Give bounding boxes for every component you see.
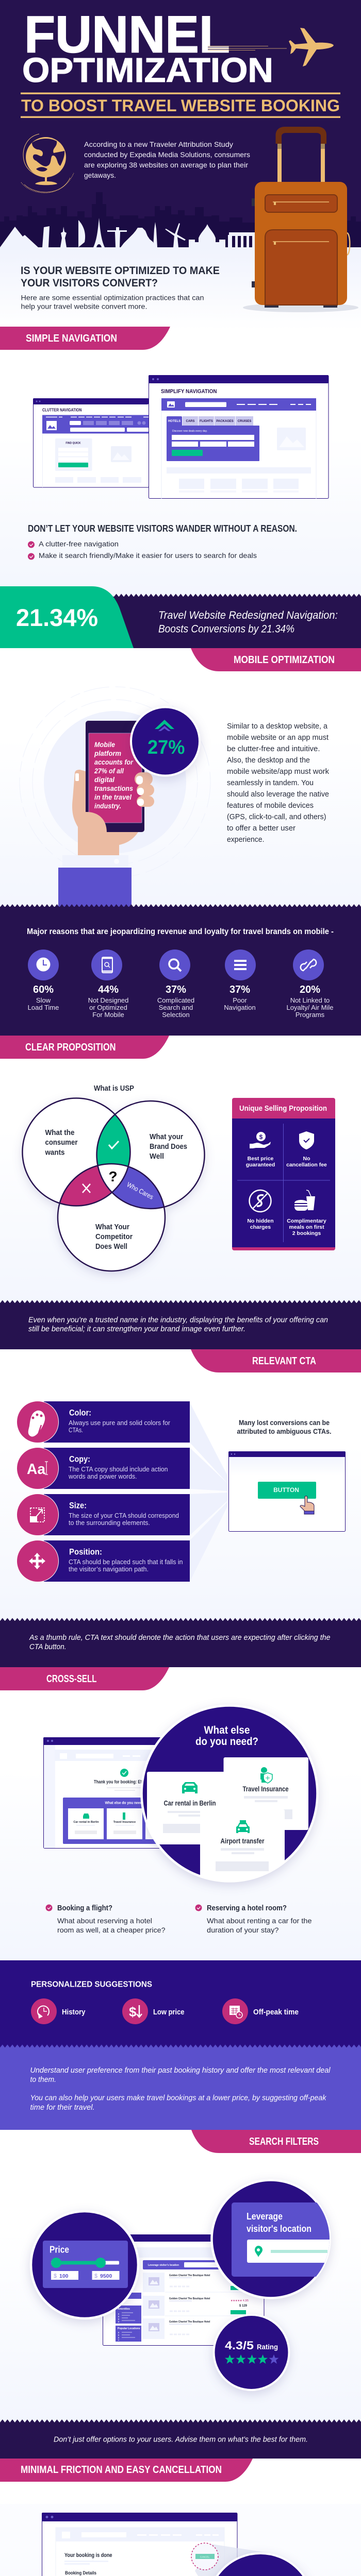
intro text: conducted by Expedia Media Solutions, consumers <box>84 150 250 159</box>
magnifier heading: do you need? <box>195 1736 258 1748</box>
stats labels: Complicated <box>157 996 194 1004</box>
browser: simplify navigation: SIMPLIFY NAVIGATION <box>161 388 217 395</box>
mobile body text: features of mobile devices <box>227 801 314 810</box>
mobile body text: should also leverage the native <box>227 790 329 799</box>
USP labels: Best price <box>248 1156 274 1162</box>
icon: clock <box>28 950 59 980</box>
icon: suitcase <box>243 127 358 312</box>
row: size <box>17 1494 190 1535</box>
panel: personalized suggestions <box>0 1960 361 2048</box>
icon: pointer hand <box>300 1496 314 1514</box>
browser: CTA button <box>228 1451 346 1531</box>
callout: small cancel button <box>191 2543 268 2576</box>
browser: booking done <box>42 2513 237 2576</box>
browser: simplify navigation: FLIGHTS <box>200 420 213 423</box>
mobile body text <box>227 722 329 844</box>
magnifier: rating: Rating <box>257 2343 278 2351</box>
browser: CTA button: BUTTON <box>273 1486 299 1494</box>
magnifier heading: What else <box>204 1724 250 1736</box>
cross-sell tips <box>45 1904 312 1934</box>
checklist: navigation tips: A clutter-free navigation <box>39 540 119 548</box>
stats labels: Navigation <box>224 1004 256 1011</box>
listing rows: Golden Chariot The Boutique Hotel <box>169 2320 210 2324</box>
panel: reasons on mobile <box>0 904 361 1036</box>
panel: personalized suggestions: PERSONALIZED SUGGESTIONS <box>31 1980 152 1989</box>
icon: hand with coin: $ <box>259 1133 263 1141</box>
note band: user preference <box>0 2044 361 2130</box>
icon: globe <box>21 134 74 193</box>
heading: is your website optimized <box>21 265 220 289</box>
icon: Aa text: Aa <box>27 1461 46 1478</box>
cross-sell tips: Booking a flight? <box>57 1904 112 1912</box>
phone screen text: 27% of all <box>94 767 124 775</box>
CTA statement: attributed to ambiguous CTAs. <box>237 1428 331 1435</box>
phone screen text: Mobile <box>94 740 115 749</box>
badge: 27% <box>131 707 200 776</box>
venn diagram: Well <box>150 1153 164 1161</box>
note band: thumb rule: CTA button. <box>29 1643 66 1651</box>
card: airport transfer <box>200 1809 285 1880</box>
mobile body text: Similar to a desktop website, a <box>227 722 328 731</box>
listing rows: ★★★★★ 4.3/5 <box>231 2299 249 2302</box>
cross-sell tips: room as well, at a cheaper price? <box>57 1926 166 1934</box>
USP labels: charges <box>250 1224 271 1230</box>
magnifier: what else do you need <box>141 1705 318 1892</box>
row: color: Color: <box>69 1408 91 1418</box>
intro subtext <box>21 294 204 310</box>
stats labels: 44% <box>98 984 119 995</box>
tab: mobile optimization <box>191 648 361 671</box>
magnifier: leverage location: Leverage <box>247 2211 283 2222</box>
browser: search results: Amenities <box>118 2308 130 2311</box>
magnifier: cancel button <box>208 2553 313 2576</box>
stats labels: 20% <box>300 984 320 995</box>
note band: user preference: to them. <box>30 2076 56 2084</box>
section background: minimal friction <box>0 2459 361 2576</box>
stats labels: 60% <box>33 984 54 995</box>
icon: mobile search <box>91 950 122 980</box>
row: copy: words and power words. <box>68 1473 137 1480</box>
icon: burger and cup <box>294 1190 315 1211</box>
USP labels: guaranteed <box>246 1162 275 1168</box>
USP labels <box>246 1156 327 1236</box>
magnifier: leverage location: visitor's location <box>247 2224 311 2234</box>
intro text: getaways. <box>84 171 116 179</box>
icon: hand with coin <box>250 1132 271 1148</box>
magnifier: price filter: Price <box>50 2244 69 2255</box>
note band: user preference: time for their travel. <box>30 2104 95 2112</box>
tab: minimal friction and easy cancellation <box>0 2459 253 2482</box>
venn diagram: wants <box>45 1149 65 1157</box>
skyline: landmarks silhouette <box>0 218 255 247</box>
card: airport transfer: Airport transfer <box>221 1837 265 1845</box>
venn diagram <box>23 1098 204 1271</box>
section background: simple navigation <box>0 350 361 597</box>
tab: relevant CTA: RELEVANT CTA <box>252 1355 316 1367</box>
row: copy: Copy: <box>69 1454 90 1464</box>
mobile body text: to offer a better user <box>227 824 296 833</box>
browser: thank you page: Travel Insurance <box>113 1821 136 1824</box>
row: size: The size of your CTA should correspond <box>69 1512 179 1519</box>
USP labels: No hidden <box>247 1218 274 1224</box>
row: size: to the surrounding elements. <box>69 1519 150 1527</box>
stats labels: Not Linked to <box>290 996 330 1004</box>
icon: airplane with trails <box>208 28 334 66</box>
icon: low price <box>122 1998 148 2024</box>
icon: magnifier <box>159 950 190 980</box>
browser: simplify navigation: CARS <box>186 420 195 423</box>
stats labels: or Optimized <box>89 1004 127 1011</box>
listing rows: Golden Chariot The Boutique Hotel <box>169 2297 210 2300</box>
cross-sell tips: duration of your stay? <box>207 1926 279 1934</box>
hero panel <box>0 0 361 330</box>
section background: relevant CTA <box>0 1349 361 1622</box>
phone screen text <box>94 740 134 810</box>
stats labels: Search and <box>159 1004 193 1011</box>
badge: 27%: 27% <box>147 737 185 758</box>
magnifier: rating <box>214 2315 289 2390</box>
listing rows: Golden Chariot The Boutique Hotel <box>169 2274 210 2277</box>
listing rows <box>143 2273 253 2339</box>
note band: thumb rule <box>0 1618 361 1667</box>
venn diagram: What the <box>45 1129 74 1137</box>
browser: thank you page: Thank you for booking: El <box>94 1780 141 1785</box>
stats labels: Poor <box>233 996 247 1004</box>
tab: clear proposition <box>0 1036 169 1059</box>
browser: thank you page: Car rental in Berlin <box>73 1821 99 1824</box>
row: color <box>17 1401 190 1443</box>
checklist: navigation tips: Make it search friendly/Make it easier for users to search for deals <box>39 551 257 560</box>
stat band: 21.34% conversions: 21.34% <box>16 604 98 631</box>
panel: personalized suggestions: Low price <box>153 2008 185 2016</box>
row: copy <box>17 1448 190 1489</box>
mobile body text: mobile website or an app must <box>227 733 329 742</box>
tab: cross-sell <box>0 1667 169 1690</box>
browser: clutter navigation <box>33 398 149 487</box>
venn diagram: Does Well <box>95 1243 127 1251</box>
panel: reasons on mobile: Major reasons that are jeopardizing revenue and loyalty for travel brands on mobile - <box>27 927 334 936</box>
browser: search results: Leverage visitor’s location <box>148 2264 179 2267</box>
section background: clear proposition <box>0 1036 361 1303</box>
venn diagram: ? <box>108 1168 118 1184</box>
phone screen text: platform <box>94 749 121 757</box>
browser: clutter navigation: CLUTTER NAVIGATION <box>42 408 82 412</box>
USP labels: 2 bookings <box>292 1230 321 1236</box>
mobile body text: seamlessly in tandem. You <box>227 778 314 787</box>
row: color: Always use pure and solid colors for <box>69 1419 170 1427</box>
browser: simplify navigation: CRUISES <box>238 420 251 423</box>
tab: clear proposition: CLEAR PROPOSITION <box>25 1042 116 1053</box>
tab: simple navigation <box>0 327 170 350</box>
stats labels: 37% <box>166 984 186 995</box>
browser: booking done: Booking Details <box>65 2570 96 2576</box>
stat band: 21.34% conversions: Boosts Conversions by 21.34% <box>158 623 294 635</box>
card: travel insurance: Travel Insurance <box>242 1785 289 1793</box>
browser: simplify navigation <box>149 375 329 499</box>
venn diagram: Competitor <box>95 1233 133 1241</box>
magnifier: leverage location <box>211 2180 345 2298</box>
browser: thank you page: What else do you need <box>105 1801 142 1805</box>
skyline: back silhouette <box>0 192 361 247</box>
icon: menu lines <box>225 950 256 980</box>
row: color: CTAs. <box>69 1427 83 1434</box>
phone screen text: digital <box>94 775 115 784</box>
browser: simplify navigation: PACKAGES <box>216 420 234 423</box>
phone screen text: industry. <box>94 802 121 810</box>
icon: no hidden charges <box>250 1190 271 1212</box>
venn diagram: What Your <box>95 1223 129 1231</box>
venn diagram: What your <box>150 1133 183 1141</box>
magnifier: price filter: $ <box>94 2273 97 2279</box>
icon: chain link <box>293 950 324 980</box>
mobile body text: (GPS, click-to-call, and others) <box>227 812 326 821</box>
stat band: 21.34% conversions: Travel Website Redesigned Navigation: <box>158 609 338 621</box>
browser: booking done: Your booking is done <box>64 2552 112 2558</box>
magnifier: price filter: $ <box>54 2273 57 2279</box>
intro text: According to a new Traveler Attribution Study <box>84 140 233 148</box>
mobile body text: Also, the desktop and the <box>227 756 310 765</box>
magnifier: price filter: 100 <box>59 2273 69 2279</box>
venn diagram: consumer <box>45 1139 78 1147</box>
icon: shield check <box>299 1131 314 1149</box>
browser: simplify navigation: HOTELS <box>168 420 180 423</box>
mobile body text: mobile website/app must work <box>227 767 329 776</box>
intro subtext: help your travel website convert more. <box>21 302 147 310</box>
USP labels: No <box>303 1156 310 1162</box>
panel: personalized suggestions: History <box>62 2008 86 2016</box>
magnifier heading <box>195 1724 258 1748</box>
row: position <box>17 1540 190 1582</box>
subtitle with rules: TO BOOST TRAVEL WEBSITE BOOKING <box>21 96 340 115</box>
tab: mobile optimization: MOBILE OPTIMIZATION <box>234 654 335 666</box>
beams to browser <box>190 1402 228 1582</box>
phone screen text: transactions <box>94 784 133 792</box>
note band: benefits: Even when you’re a trusted name in the industry, displaying the benefits of your offering can <box>28 1316 328 1324</box>
title: FUNNEL: FUNNEL <box>24 6 230 64</box>
card: car rental: Car rental in Berlin <box>164 1799 216 1807</box>
card: unique selling proposition: Unique Selling Proposition <box>239 1104 327 1113</box>
panel: personalized suggestions: Off-peak time <box>253 2008 299 2016</box>
icon: off-peak calendar <box>222 1998 248 2024</box>
USP labels: cancellation fee <box>286 1162 327 1168</box>
icon: resize <box>30 1508 44 1522</box>
hand and sleeve <box>72 770 138 855</box>
stats labels: For Mobile <box>92 1011 124 1019</box>
intro text <box>84 140 250 179</box>
browser: clutter navigation: FIND QUICK <box>65 442 81 445</box>
listing rows: $ 129 <box>239 2304 248 2308</box>
icon: history <box>31 1998 57 2024</box>
CTA statement <box>237 1419 331 1435</box>
CTA statement: Many lost conversions can be <box>239 1419 330 1427</box>
section background: mobile optimization <box>0 648 361 907</box>
cross-sell tips: What about renting a car for the <box>207 1917 312 1925</box>
tab: relevant CTA <box>191 1349 361 1372</box>
browser: search results <box>103 2234 264 2345</box>
intro text: are exploring 38 websites on average to plan their <box>84 161 248 169</box>
browser: search results: Popular Locations <box>118 2327 140 2330</box>
section background: search filters <box>0 2130 361 2422</box>
phone screen text: in the travel <box>94 793 132 801</box>
magnifier: price filter <box>31 2211 138 2318</box>
section background: cross-sell <box>0 1667 361 1960</box>
heading: don't let visitors wander: DON’T LET YOUR WEBSITE VISITORS WANDER WITHOUT A REASON. <box>28 523 297 534</box>
browser: thank you page <box>43 1737 167 1849</box>
note band: benefits <box>0 1300 361 1349</box>
tab: search filters: SEARCH FILTERS <box>249 2136 319 2147</box>
stats labels: Slow <box>36 996 51 1004</box>
stats labels: Load Time <box>28 1004 59 1011</box>
intro subtext: Here are some essential optimization practices that can <box>21 294 204 302</box>
note band: advise users <box>0 2419 361 2459</box>
card: unique selling proposition <box>232 1098 335 1250</box>
cross-sell tips: Reserving a hotel room? <box>207 1904 287 1912</box>
heading: is your website optimized: YOUR VISITORS CONVERT? <box>21 277 158 289</box>
row: position: CTA should be placed such that it falls in <box>69 1558 183 1566</box>
note band: advise users: Don’t just offer options to your users. Advise them on what’s the best for them. <box>54 2436 308 2444</box>
note band: user preference: You can also help your users make travel bookings at a lower price, by suggesting off-peak <box>30 2094 326 2102</box>
USP labels: meals on first <box>289 1224 324 1230</box>
mobile body text: experience. <box>227 835 264 844</box>
stats labels: Not Designed <box>88 996 128 1004</box>
cross-sell tips: What about reserving a hotel <box>57 1917 152 1925</box>
venn diagram: Brand Does <box>150 1143 187 1151</box>
heading: what is USP: What is USP <box>94 1084 134 1093</box>
heading: is your website optimized: IS YOUR WEBSITE OPTIMIZED TO MAKE <box>21 265 220 277</box>
tab: search filters <box>191 2130 361 2153</box>
phone <box>86 721 144 832</box>
card: car rental <box>147 1772 229 1844</box>
icon: move arrows <box>29 1553 45 1569</box>
title: OPTIMIZATION: OPTIMIZATION <box>22 51 273 90</box>
stat band: 21.34% conversions <box>0 586 361 648</box>
phone illustration with hand <box>20 687 210 907</box>
stats labels: 37% <box>229 984 250 995</box>
tab: simple navigation: SIMPLE NAVIGATION <box>26 333 117 344</box>
magnifier: rating: 4.3/5 <box>225 2339 254 2352</box>
note band: benefits: still be beneficial; it can strengthen your brand image even further. <box>28 1325 245 1333</box>
checklist: navigation tips <box>28 540 257 560</box>
phone screen text: accounts for <box>94 758 134 766</box>
row: size: Size: <box>69 1500 87 1511</box>
browser: simplify navigation: Discover new deals every day. <box>172 430 207 433</box>
icon: palette <box>28 1411 45 1437</box>
note band: thumb rule: As a thumb rule, CTA text should denote the action that users are expecting after clicking the <box>29 1634 331 1642</box>
stats labels: Selection <box>162 1011 190 1019</box>
card: travel insurance <box>224 1757 308 1830</box>
tab: cross-sell: CROSS-SELL <box>46 1673 97 1685</box>
callout: small cancel button: CANCEL <box>200 2555 210 2558</box>
stats labels: Loyalty/ Air Mile <box>286 1004 334 1011</box>
note band: user preference: Understand user preference from their past booking history and offer the most relevant deal <box>30 2066 331 2075</box>
row: position: Position: <box>69 1547 102 1557</box>
magnifier: price filter: 9500 <box>100 2273 112 2279</box>
stats labels: Programs <box>296 1011 325 1019</box>
venn diagram: Who Cares <box>126 1180 155 1201</box>
tab: minimal friction and easy cancellation: MINIMAL FRICTION AND EASY CANCELLATION <box>21 2464 222 2476</box>
stats labels <box>28 984 334 1019</box>
row: position: the visitor’s navigation path. <box>69 1566 149 1573</box>
row: copy: The CTA copy should include action <box>69 1466 168 1473</box>
USP labels: Complimentary <box>287 1218 326 1224</box>
icon: low price: $ <box>129 2004 137 2020</box>
mobile body text: be clutter-free and intuitive. <box>227 744 320 753</box>
